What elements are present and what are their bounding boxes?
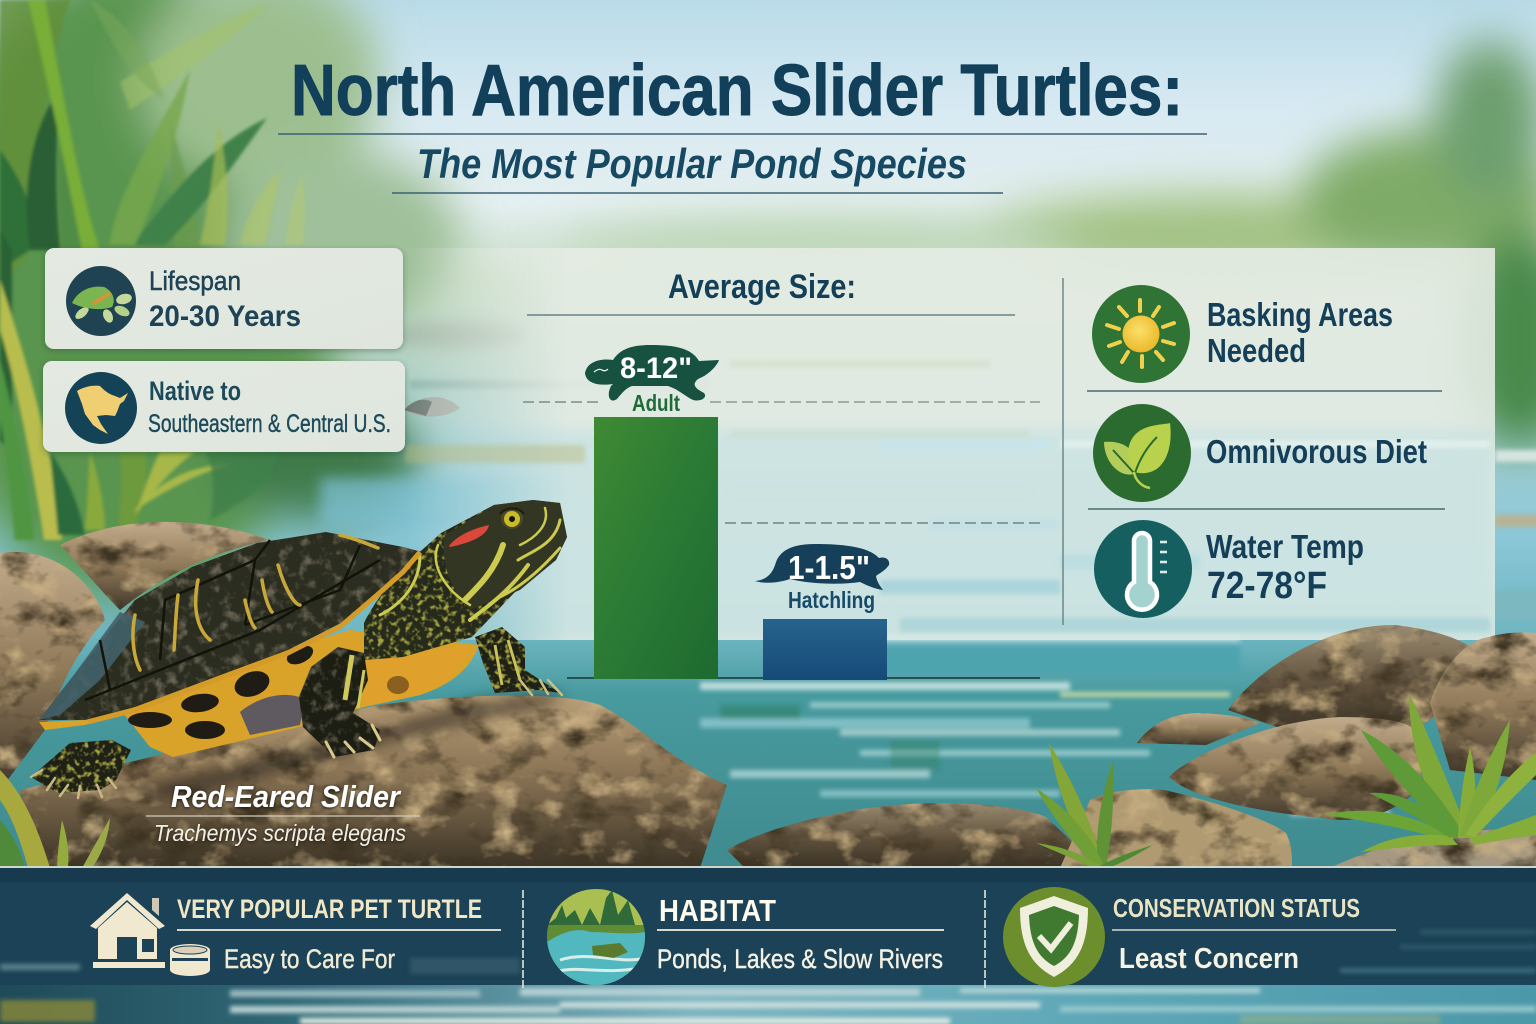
badge: adult turtle silhouette: 8-12" xyxy=(620,352,692,385)
icon: North America map xyxy=(65,372,137,444)
background: left reeds xyxy=(0,0,305,540)
habitat detail: Ponds, Lakes & Slow Rivers xyxy=(657,944,943,974)
banner water reflections xyxy=(0,930,1536,974)
card: native range xyxy=(43,361,405,452)
icon: leaf xyxy=(1093,404,1191,502)
lifespan value: 20-30 Years xyxy=(149,300,301,333)
chart: average size xyxy=(523,268,1040,680)
native label: Native to xyxy=(149,376,241,406)
habitat heading: HABITAT xyxy=(659,893,776,928)
pet turtle heading: VERY POPULAR PET TURTLE xyxy=(177,894,482,924)
panel water ripple overlay xyxy=(405,360,1490,632)
icon: conservation shield xyxy=(1003,887,1105,987)
species caption xyxy=(146,779,420,846)
rocks behind the turtle xyxy=(0,522,270,790)
eye xyxy=(500,507,524,529)
red ear mark xyxy=(449,525,489,547)
conservation heading: CONSERVATION STATUS xyxy=(1113,893,1360,923)
badge: adult turtle silhouette xyxy=(585,345,719,401)
chart heading: Average Size: xyxy=(668,268,856,306)
shell scutes xyxy=(85,540,380,700)
subtitle: The Most Popular Pond Species xyxy=(417,140,967,187)
item: basking areas: Needed xyxy=(1207,332,1306,369)
turtle illustration: red-eared slider xyxy=(31,500,567,800)
scientific name: Trachemys scripta elegans xyxy=(154,820,406,846)
icon: house and food tin xyxy=(90,893,210,976)
bottom banner xyxy=(0,866,1536,990)
icon: sun xyxy=(1092,285,1190,383)
badge: hatchling turtle silhouette: 1-1.5" xyxy=(788,549,870,586)
icon: thermometer xyxy=(1094,520,1192,618)
translucent info panel xyxy=(405,248,1495,640)
background: right foliage haze xyxy=(560,40,1536,450)
near front leg xyxy=(299,647,380,757)
plastron dark markings xyxy=(128,642,409,739)
card: lifespan xyxy=(45,248,403,349)
item: omnivorous diet xyxy=(1093,404,1427,502)
item: basking areas xyxy=(1092,285,1393,383)
shell dome xyxy=(39,532,422,720)
icon: habitat pond scene xyxy=(547,889,645,985)
bar: adult xyxy=(594,417,718,679)
plants: right foreground xyxy=(1036,693,1536,868)
water temp value: 72-78°F xyxy=(1207,565,1327,607)
bottom water strip xyxy=(0,980,1536,1024)
column divider xyxy=(1062,278,1064,625)
icon: turtle xyxy=(66,266,136,336)
diet text: Omnivorous Diet xyxy=(1206,433,1427,470)
turtle rear leg xyxy=(31,740,131,793)
badge: hatchling turtle silhouette xyxy=(755,544,889,590)
plants: left foreground xyxy=(0,770,110,868)
rocks: right side xyxy=(727,625,1536,868)
background: water and distant rock xyxy=(320,380,1536,816)
background: left foliage haze xyxy=(0,0,530,600)
lifespan label: Lifespan xyxy=(149,266,241,296)
label: adult: Adult xyxy=(632,390,680,416)
bar: hatchling xyxy=(763,619,887,680)
far front leg xyxy=(475,627,560,693)
basking text: Basking Areas xyxy=(1207,296,1393,333)
shell yellow stripes xyxy=(133,535,378,670)
title: North American Slider Turtles: xyxy=(291,51,1183,131)
shell rim yellow edge xyxy=(88,552,420,722)
water temp label: Water Temp xyxy=(1206,528,1364,565)
rock: turtle basking rock xyxy=(20,696,727,868)
rock shadow under turtle xyxy=(130,692,565,800)
neck and head xyxy=(364,500,567,660)
item: water temperature xyxy=(1094,520,1364,618)
label: hatchling: Hatchling xyxy=(788,587,875,613)
head stripes xyxy=(380,508,560,620)
native value: Southeastern & Central U.S. xyxy=(148,410,391,438)
plastron xyxy=(39,630,479,757)
conservation detail: Least Concern xyxy=(1119,943,1299,975)
species name: Red-Eared Slider xyxy=(171,779,402,814)
pet turtle detail: Easy to Care For xyxy=(224,944,395,974)
